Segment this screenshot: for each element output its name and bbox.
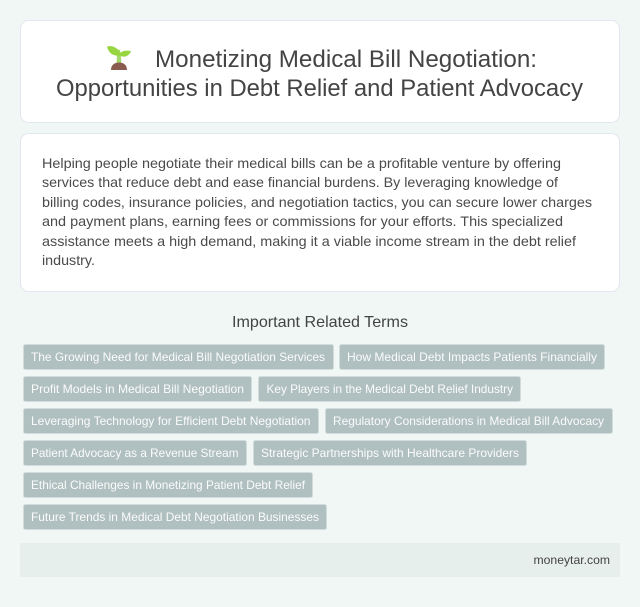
tag 6 xyxy=(326,408,612,434)
panel: description card xyxy=(20,134,620,292)
tag 1: The Growing Need for Medical Bill Negotiation Services xyxy=(31,350,325,364)
tag 3 xyxy=(24,376,252,402)
icon: seedling xyxy=(107,46,131,70)
tag list xyxy=(24,344,612,530)
tag 10: Future Trends in Medical Debt Negotiation Businesses xyxy=(31,510,319,524)
tag 2 xyxy=(340,344,604,370)
tag 8 xyxy=(254,440,526,466)
tag 9 xyxy=(24,472,312,498)
heading: important related terms: Important Related Terms xyxy=(232,314,408,331)
tag 10 xyxy=(24,504,326,530)
tag 4: Key Players in the Medical Debt Relief Industry xyxy=(266,382,513,396)
description line 4: and payment plans, earning fees or commissions for your efforts. This specialized xyxy=(42,213,563,229)
tag 5 xyxy=(24,408,318,434)
description line 1: Helping people negotiate their medical bills can be a profitable venture by offering xyxy=(42,155,561,171)
tag 1 xyxy=(24,344,334,370)
description line 3: billing codes, insurance policies, and negotiation tactics, you can secure lower charges xyxy=(42,194,592,210)
footer bar xyxy=(20,543,620,577)
panel: header card xyxy=(20,20,620,122)
tag 7 xyxy=(24,440,246,466)
description line 2: services that reduce debt and ease financial burdens. By leveraging knowledge of xyxy=(42,174,558,190)
tag 3: Profit Models in Medical Bill Negotiation xyxy=(31,382,244,396)
tag 6: Regulatory Considerations in Medical Bill Advocacy xyxy=(333,414,604,428)
tag 9: Ethical Challenges in Monetizing Patient Debt Relief xyxy=(31,478,306,492)
tag 5: Leveraging Technology for Efficient Debt Negotiation xyxy=(31,414,310,428)
description line 6: industry. xyxy=(42,252,95,268)
title line 1: Monetizing Medical Bill Negotiation: xyxy=(155,46,537,73)
tag 4 xyxy=(258,376,520,402)
tag 7: Patient Advocacy as a Revenue Stream xyxy=(31,446,239,460)
tag 2: How Medical Debt Impacts Patients Financially xyxy=(347,350,597,364)
title line 2: Opportunities in Debt Relief and Patient Advocacy xyxy=(56,75,583,102)
footer source text: moneytar.com xyxy=(534,553,610,567)
description line 5: assistance meets a high demand, making it a viable income stream in the debt relief xyxy=(42,233,576,249)
tag 8: Strategic Partnerships with Healthcare Providers xyxy=(261,446,519,460)
